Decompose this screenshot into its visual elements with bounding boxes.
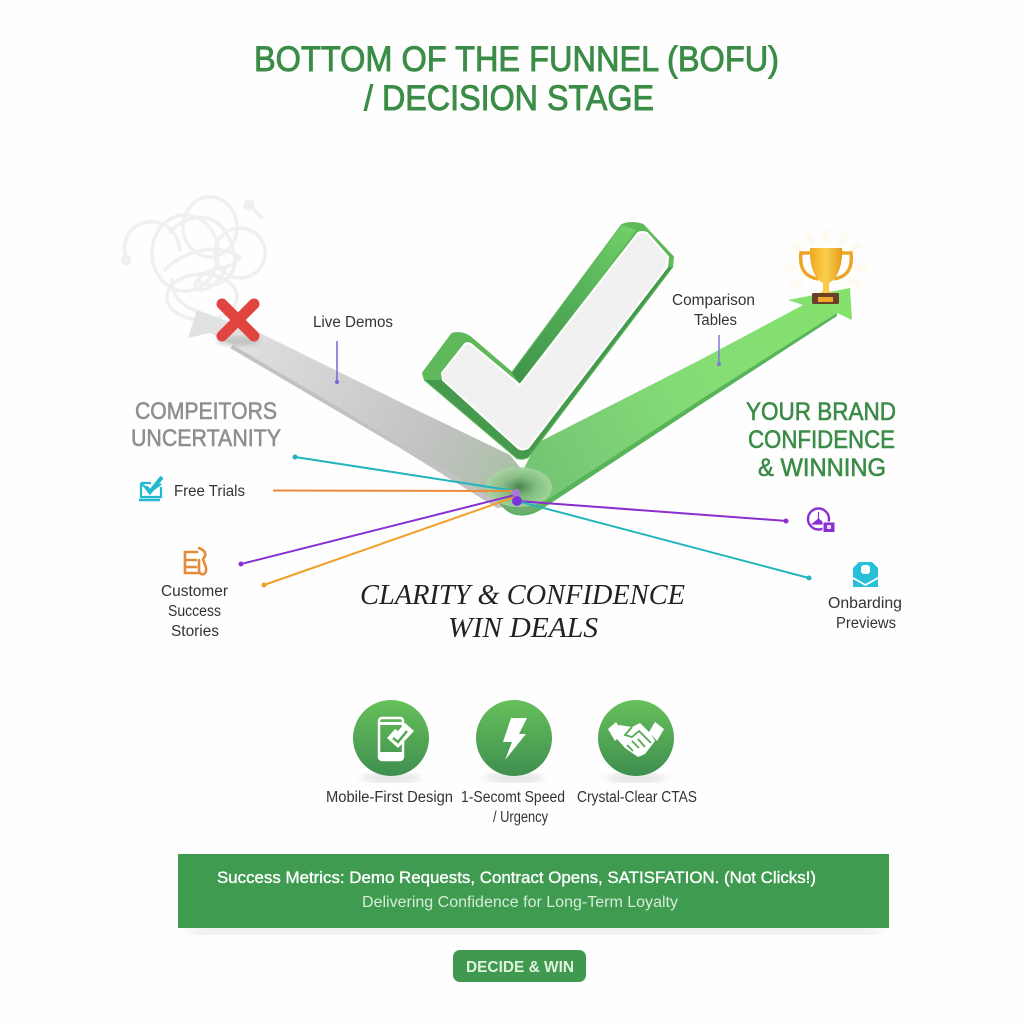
badge: decide and win	[453, 950, 586, 982]
tagline	[360, 580, 685, 644]
feature: one-second speed: / Urgency	[493, 809, 548, 826]
banner: success metrics: Delivering Confidence for Long-Term Loyalty	[362, 894, 678, 911]
title	[254, 40, 779, 118]
label: comparison tables	[672, 292, 755, 366]
item: free trials	[139, 477, 245, 500]
label: comparison tables: Comparison	[672, 292, 755, 309]
banner: success metrics	[178, 854, 889, 934]
item: customer success stories	[161, 548, 228, 640]
label: live demos	[313, 314, 393, 384]
tagline: CLARITY & CONFIDENCE	[360, 580, 685, 611]
gray competitor arrow	[188, 310, 530, 508]
icon: red cross	[216, 304, 260, 346]
feature: one-second speed: 1-Secomt Speed	[461, 789, 565, 806]
icon: trophy	[786, 232, 866, 304]
heading: competitors uncertainty: COMPEITORS	[135, 398, 277, 425]
green winning arrow	[500, 288, 852, 516]
heading: competitors uncertainty: UNCERTANITY	[131, 425, 281, 452]
connector lines	[238, 454, 812, 588]
heading: your brand confidence and winning	[746, 398, 896, 482]
label: live demos: Live Demos	[313, 314, 393, 331]
icon: tangled scribble	[122, 197, 265, 320]
feature: one-second speed	[461, 700, 565, 826]
feature: crystal-clear ctas	[577, 700, 697, 806]
item: customer success stories: Success	[168, 603, 221, 620]
heading: your brand confidence and winning: CONFIDENCE	[748, 426, 895, 454]
item: onboarding previews: Previews	[836, 615, 896, 632]
badge: decide and win: DECIDE & WIN	[466, 959, 574, 976]
banner: success metrics: Success Metrics: Demo Requests, Contract Opens, SATISFATION. (Not Clicks!)	[217, 868, 816, 887]
feature: mobile-first design: Mobile-First Design	[326, 789, 453, 806]
feature: mobile-first design	[326, 700, 453, 806]
item: onboarding previews	[828, 562, 902, 632]
item: free trials: Free Trials	[174, 483, 245, 500]
heading: your brand confidence and winning: & WINNING	[758, 454, 886, 482]
item: onboarding previews: Onbarding	[828, 595, 902, 612]
item: clock icon	[808, 508, 835, 532]
icon: large check mark	[423, 223, 673, 459]
title: / DECISION STAGE	[364, 79, 654, 118]
heading: your brand confidence and winning: YOUR BRAND	[746, 398, 896, 426]
heading: competitors uncertainty	[131, 398, 281, 452]
title: BOTTOM OF THE FUNNEL (BOFU)	[254, 40, 779, 79]
feature: crystal-clear ctas: Crystal-Clear CTAS	[577, 789, 697, 806]
item: customer success stories: Stories	[171, 623, 219, 640]
label: comparison tables: Tables	[694, 312, 737, 329]
tagline: WIN DEALS	[448, 613, 598, 644]
item: customer success stories: Customer	[161, 583, 228, 600]
glowing hub	[486, 467, 552, 514]
